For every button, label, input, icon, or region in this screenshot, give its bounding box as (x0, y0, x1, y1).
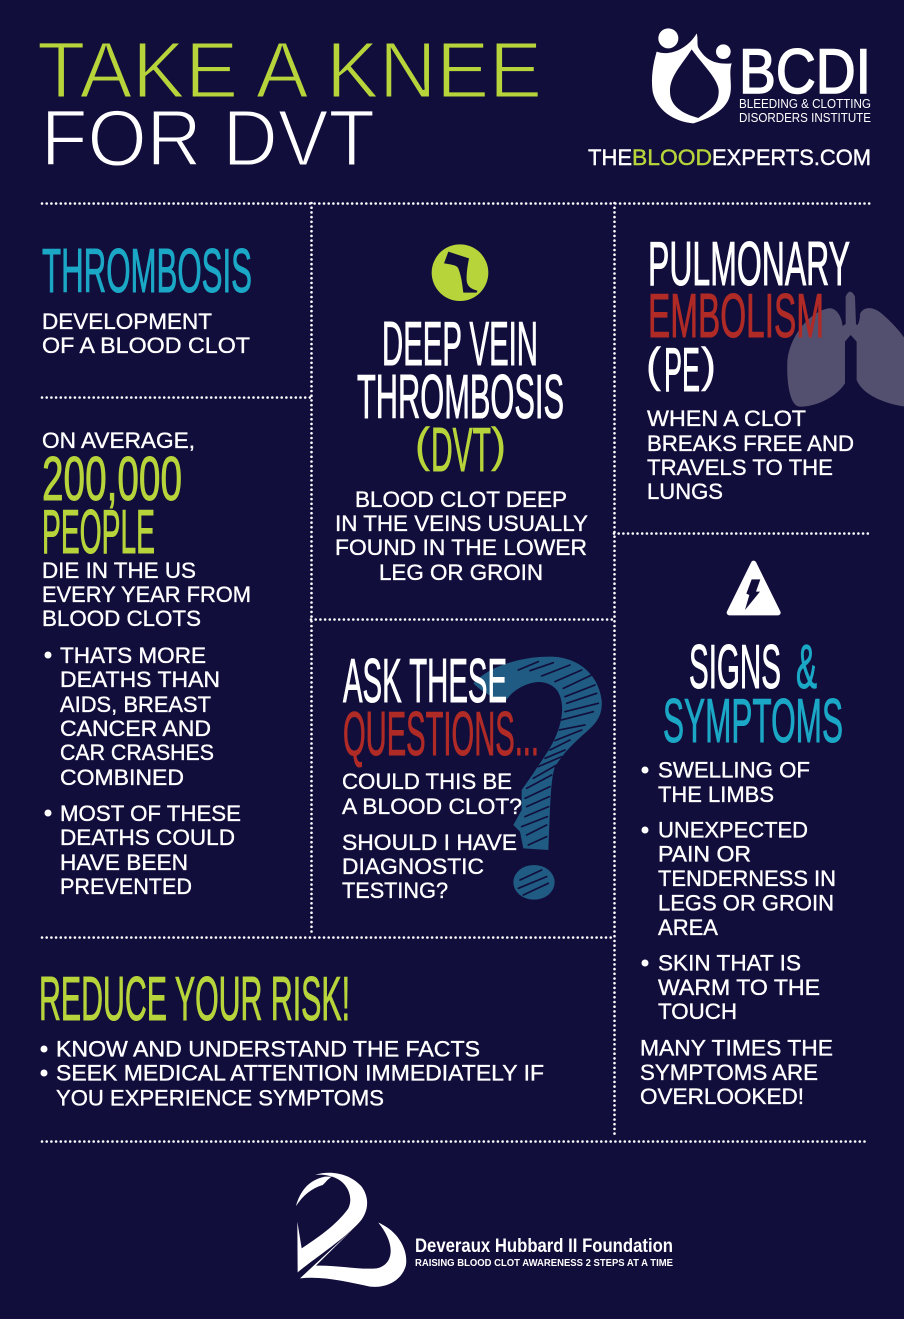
statistic description: EVERY YEAR FROM (42, 582, 251, 607)
panel: 200,000 people statistic (42, 428, 251, 899)
bullet: most deaths preventable: HAVE BEEN (60, 850, 188, 875)
dvt description: BLOOD CLOT DEEP (355, 487, 567, 512)
intro text: ON AVERAGE, (42, 428, 195, 453)
foundation logo (296, 1173, 673, 1287)
dvt description: IN THE VEINS USUALLY (335, 511, 588, 536)
title (37, 26, 542, 182)
callout: symptoms overlooked (640, 1036, 833, 1109)
icon: warning triangle with lightning bolt (729, 563, 778, 613)
question: should i have diagnostic testing: SHOULD I HAVE (342, 830, 517, 855)
question: should i have diagnostic testing: DIAGNOSTIC (342, 854, 484, 879)
risk bullet list: KNOW AND UNDERSTAND THE FACTS (56, 1036, 480, 1062)
bullet: more deaths than aids, breast cancer and car crashes: CANCER AND (60, 716, 211, 741)
bullet: swelling: SWELLING OF (658, 758, 810, 782)
statistic: 200,000 people: 200,000 (42, 445, 182, 514)
bullet: most deaths preventable: DEATHS COULD (60, 825, 235, 850)
bullet: more deaths than aids, breast cancer and car crashes: AIDS, BREAST (60, 692, 211, 717)
pe description: TRAVELS TO THE (647, 455, 833, 480)
panel: signs and symptoms (640, 563, 843, 1109)
bullet: pain or tenderness: PAIN OR (658, 842, 751, 866)
heading: signs and symptoms (663, 633, 843, 756)
panel: ask these questions: QUESTIONS... (343, 700, 539, 769)
definition text (42, 309, 250, 358)
icon: leg in circle (432, 244, 488, 301)
dvt description: LEG OR GROIN (379, 560, 543, 585)
bullet: more deaths than aids, breast cancer and car crashes: COMBINED (60, 765, 184, 790)
bullet: warm skin: WARM TO THE (658, 975, 820, 1000)
bullet: more deaths than aids, breast cancer and car crashes (44, 643, 220, 790)
panel: reduce your risk (39, 965, 544, 1110)
heading: deep vein thrombosis: ( (415, 418, 430, 471)
panel: reduce your risk: REDUCE YOUR RISK! (39, 965, 350, 1034)
dvt description (335, 487, 588, 585)
title: FOR DVT (41, 94, 375, 182)
pe description (647, 406, 854, 504)
panel: thrombosis definition (42, 237, 252, 358)
definition text: OF A BLOOD CLOT (42, 333, 250, 358)
website url (588, 145, 871, 170)
dvt description: FOUND IN THE LOWER (335, 535, 587, 560)
heading: deep vein thrombosis: DEEP VEIN (382, 310, 538, 379)
bullet: most deaths preventable: PREVENTED (60, 874, 192, 899)
heading: pulmonary embolism: ( (646, 338, 661, 391)
bullet: pain or tenderness: LEGS OR GROIN (658, 890, 834, 916)
foundation name and tagline (415, 1236, 673, 1269)
icon: blood drop with figures (652, 28, 732, 123)
risk bullet list: YOU EXPERIENCE SYMPTOMS (56, 1086, 384, 1110)
question: could this be a blood clot: A BLOOD CLOT? (342, 794, 522, 819)
website url: BLOOD (632, 145, 712, 170)
bullet: swelling (642, 758, 810, 807)
bullet: more deaths than aids, breast cancer and car crashes: CAR CRASHES (60, 740, 214, 765)
bullet: most deaths preventable (44, 801, 241, 899)
icon: scribbled question mark (473, 657, 602, 900)
bullet: more deaths than aids, breast cancer and car crashes: THATS MORE (60, 643, 206, 668)
question: could this be a blood clot: COULD THIS BE (342, 769, 512, 794)
icon: lungs (787, 292, 904, 407)
heading: signs and symptoms: & (796, 633, 817, 702)
title: TAKE A KNEE (37, 26, 542, 114)
callout: symptoms overlooked: OVERLOOKED! (640, 1084, 804, 1109)
panel: pulmonary embolism (646, 230, 904, 504)
pe description: WHEN A CLOT (647, 406, 806, 431)
risk bullet list (40, 1036, 544, 1110)
website url: THE (588, 145, 632, 170)
statistic: 200,000 people: PEOPLE (42, 498, 155, 567)
question: could this be a blood clot (342, 769, 522, 819)
foundation name and tagline: Deveraux Hubbard II Foundation (415, 1236, 673, 1257)
website url: EXPERTS.COM (712, 145, 871, 170)
panel: deep vein thrombosis: THROMBOSIS (357, 363, 564, 432)
risk bullet list: SEEK MEDICAL ATTENTION IMMEDIATELY IF (56, 1060, 544, 1086)
bullet: pain or tenderness: TENDERNESS IN (658, 866, 836, 891)
statistic description (42, 558, 251, 631)
foundation name and tagline: RAISING BLOOD CLOT AWARENESS 2 STEPS AT A TIME (415, 1257, 673, 1269)
heading: pulmonary embolism: PE (664, 336, 700, 405)
BCDI logo: BLEEDING & CLOTTING (739, 97, 871, 111)
icon: stylised number 2 (296, 1173, 406, 1287)
question: should i have diagnostic testing: TESTING? (342, 878, 448, 903)
BCDI logo: BCDI (739, 37, 871, 107)
bullet: swelling: THE LIMBS (658, 782, 774, 807)
bullet: pain or tenderness: AREA (658, 915, 718, 940)
heading: deep vein thrombosis: DVT (431, 416, 491, 485)
heading: deep vein thrombosis (357, 310, 564, 485)
definition text: DEVELOPMENT (42, 309, 212, 334)
callout: symptoms overlooked: MANY TIMES THE (640, 1036, 833, 1060)
callout: symptoms overlooked: SYMPTOMS ARE (640, 1060, 818, 1085)
statistic description: DIE IN THE US (42, 558, 196, 583)
bullet: pain or tenderness: UNEXPECTED (658, 818, 808, 842)
heading: signs and symptoms: SIGNS (689, 633, 781, 702)
bullet: pain or tenderness (642, 818, 836, 940)
heading: pulmonary embolism: ) (701, 338, 716, 391)
heading: ask these questions: ASK THESE (343, 647, 507, 716)
question: should i have diagnostic testing (342, 830, 517, 903)
heading: thrombosis: THROMBOSIS (42, 237, 252, 306)
statistic: 200,000 people (42, 445, 182, 567)
bullet: more deaths than aids, breast cancer and car crashes: DEATHS THAN (60, 667, 220, 692)
panel: deep vein thrombosis (335, 244, 588, 585)
heading: pulmonary embolism (646, 230, 850, 405)
statistic description: BLOOD CLOTS (42, 606, 201, 631)
BCDI logo: DISORDERS INSTITUTE (739, 111, 871, 125)
bullet: warm skin: SKIN THAT IS (658, 950, 801, 976)
bullet: most deaths preventable: MOST OF THESE (60, 801, 241, 826)
heading: ask these questions (343, 647, 539, 769)
pe description: BREAKS FREE AND (647, 431, 854, 456)
panel: ask these questions (342, 647, 602, 903)
BCDI logo (652, 28, 871, 125)
heading: deep vein thrombosis: ) (491, 418, 506, 471)
pe description: LUNGS (647, 479, 723, 504)
bullet: warm skin (642, 950, 820, 1024)
bullet: warm skin: TOUCH (658, 999, 737, 1024)
